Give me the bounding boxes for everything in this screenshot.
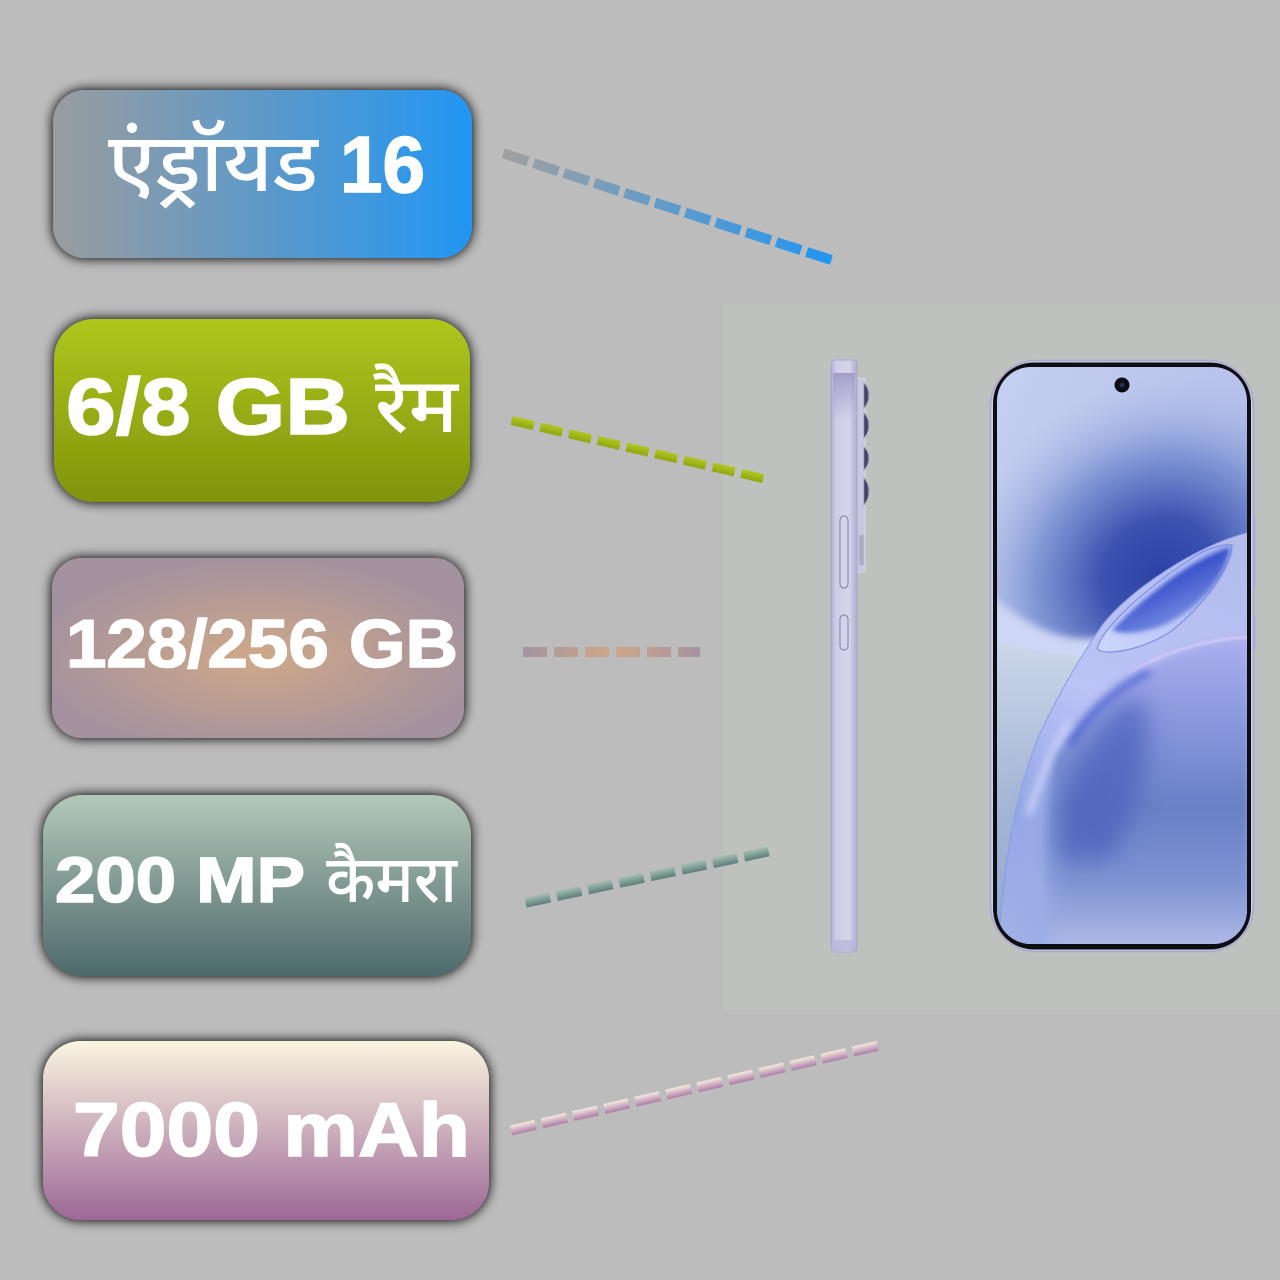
- bezel: [993, 362, 1251, 950]
- pill: RAM: [54, 319, 470, 502]
- label: Android text: एंड्रॉयड: [108, 119, 319, 225]
- camera module: [856, 378, 869, 572]
- dome dark shoulder: [1058, 695, 1149, 860]
- pill: battery: [43, 1041, 489, 1220]
- wallpaper: [990, 360, 1255, 950]
- label: RAM text: रैम: [372, 364, 459, 464]
- volume button: [840, 516, 848, 588]
- dashed connector: Android: [503, 153, 831, 260]
- phone body side: [831, 360, 857, 952]
- label: 7000 mAh: 7000 mAh: [73, 1088, 470, 1173]
- label: 6/8 GB: 6/8 GB: [66, 362, 350, 451]
- dome left fade: [1043, 784, 1058, 893]
- label: 128/256 GB: 128/256 GB: [66, 606, 458, 682]
- phone side view: [831, 360, 869, 952]
- lower dome: [1045, 637, 1250, 950]
- side buttons: [1253, 516, 1256, 650]
- dashed connector: camera: [525, 847, 770, 907]
- dashed connector: RAM: [511, 416, 764, 483]
- dark blob: [997, 401, 1247, 643]
- light crescent: [997, 598, 1096, 656]
- dome rim: [1130, 637, 1250, 672]
- label: camera text: कैमरा: [326, 843, 458, 929]
- pill: Android 16: [53, 90, 472, 258]
- label: 200 MP: 200 MP: [55, 844, 305, 916]
- big swoosh: [998, 532, 1250, 950]
- frame: [990, 360, 1254, 952]
- punch-hole camera: [1114, 378, 1130, 392]
- label: 16: 16: [340, 120, 425, 209]
- dashed connector: storage: [523, 647, 700, 657]
- dashed connector: battery: [510, 1041, 879, 1135]
- pill: storage: [52, 558, 464, 738]
- power button: [840, 615, 848, 650]
- panel: phone backdrop: [723, 304, 1280, 1010]
- grey-blue lower left: [997, 641, 1082, 944]
- leaf dark inner: [1112, 547, 1230, 633]
- phone front view: [990, 360, 1256, 952]
- pill: camera: [43, 795, 471, 976]
- leaf ellipse: [1098, 545, 1232, 652]
